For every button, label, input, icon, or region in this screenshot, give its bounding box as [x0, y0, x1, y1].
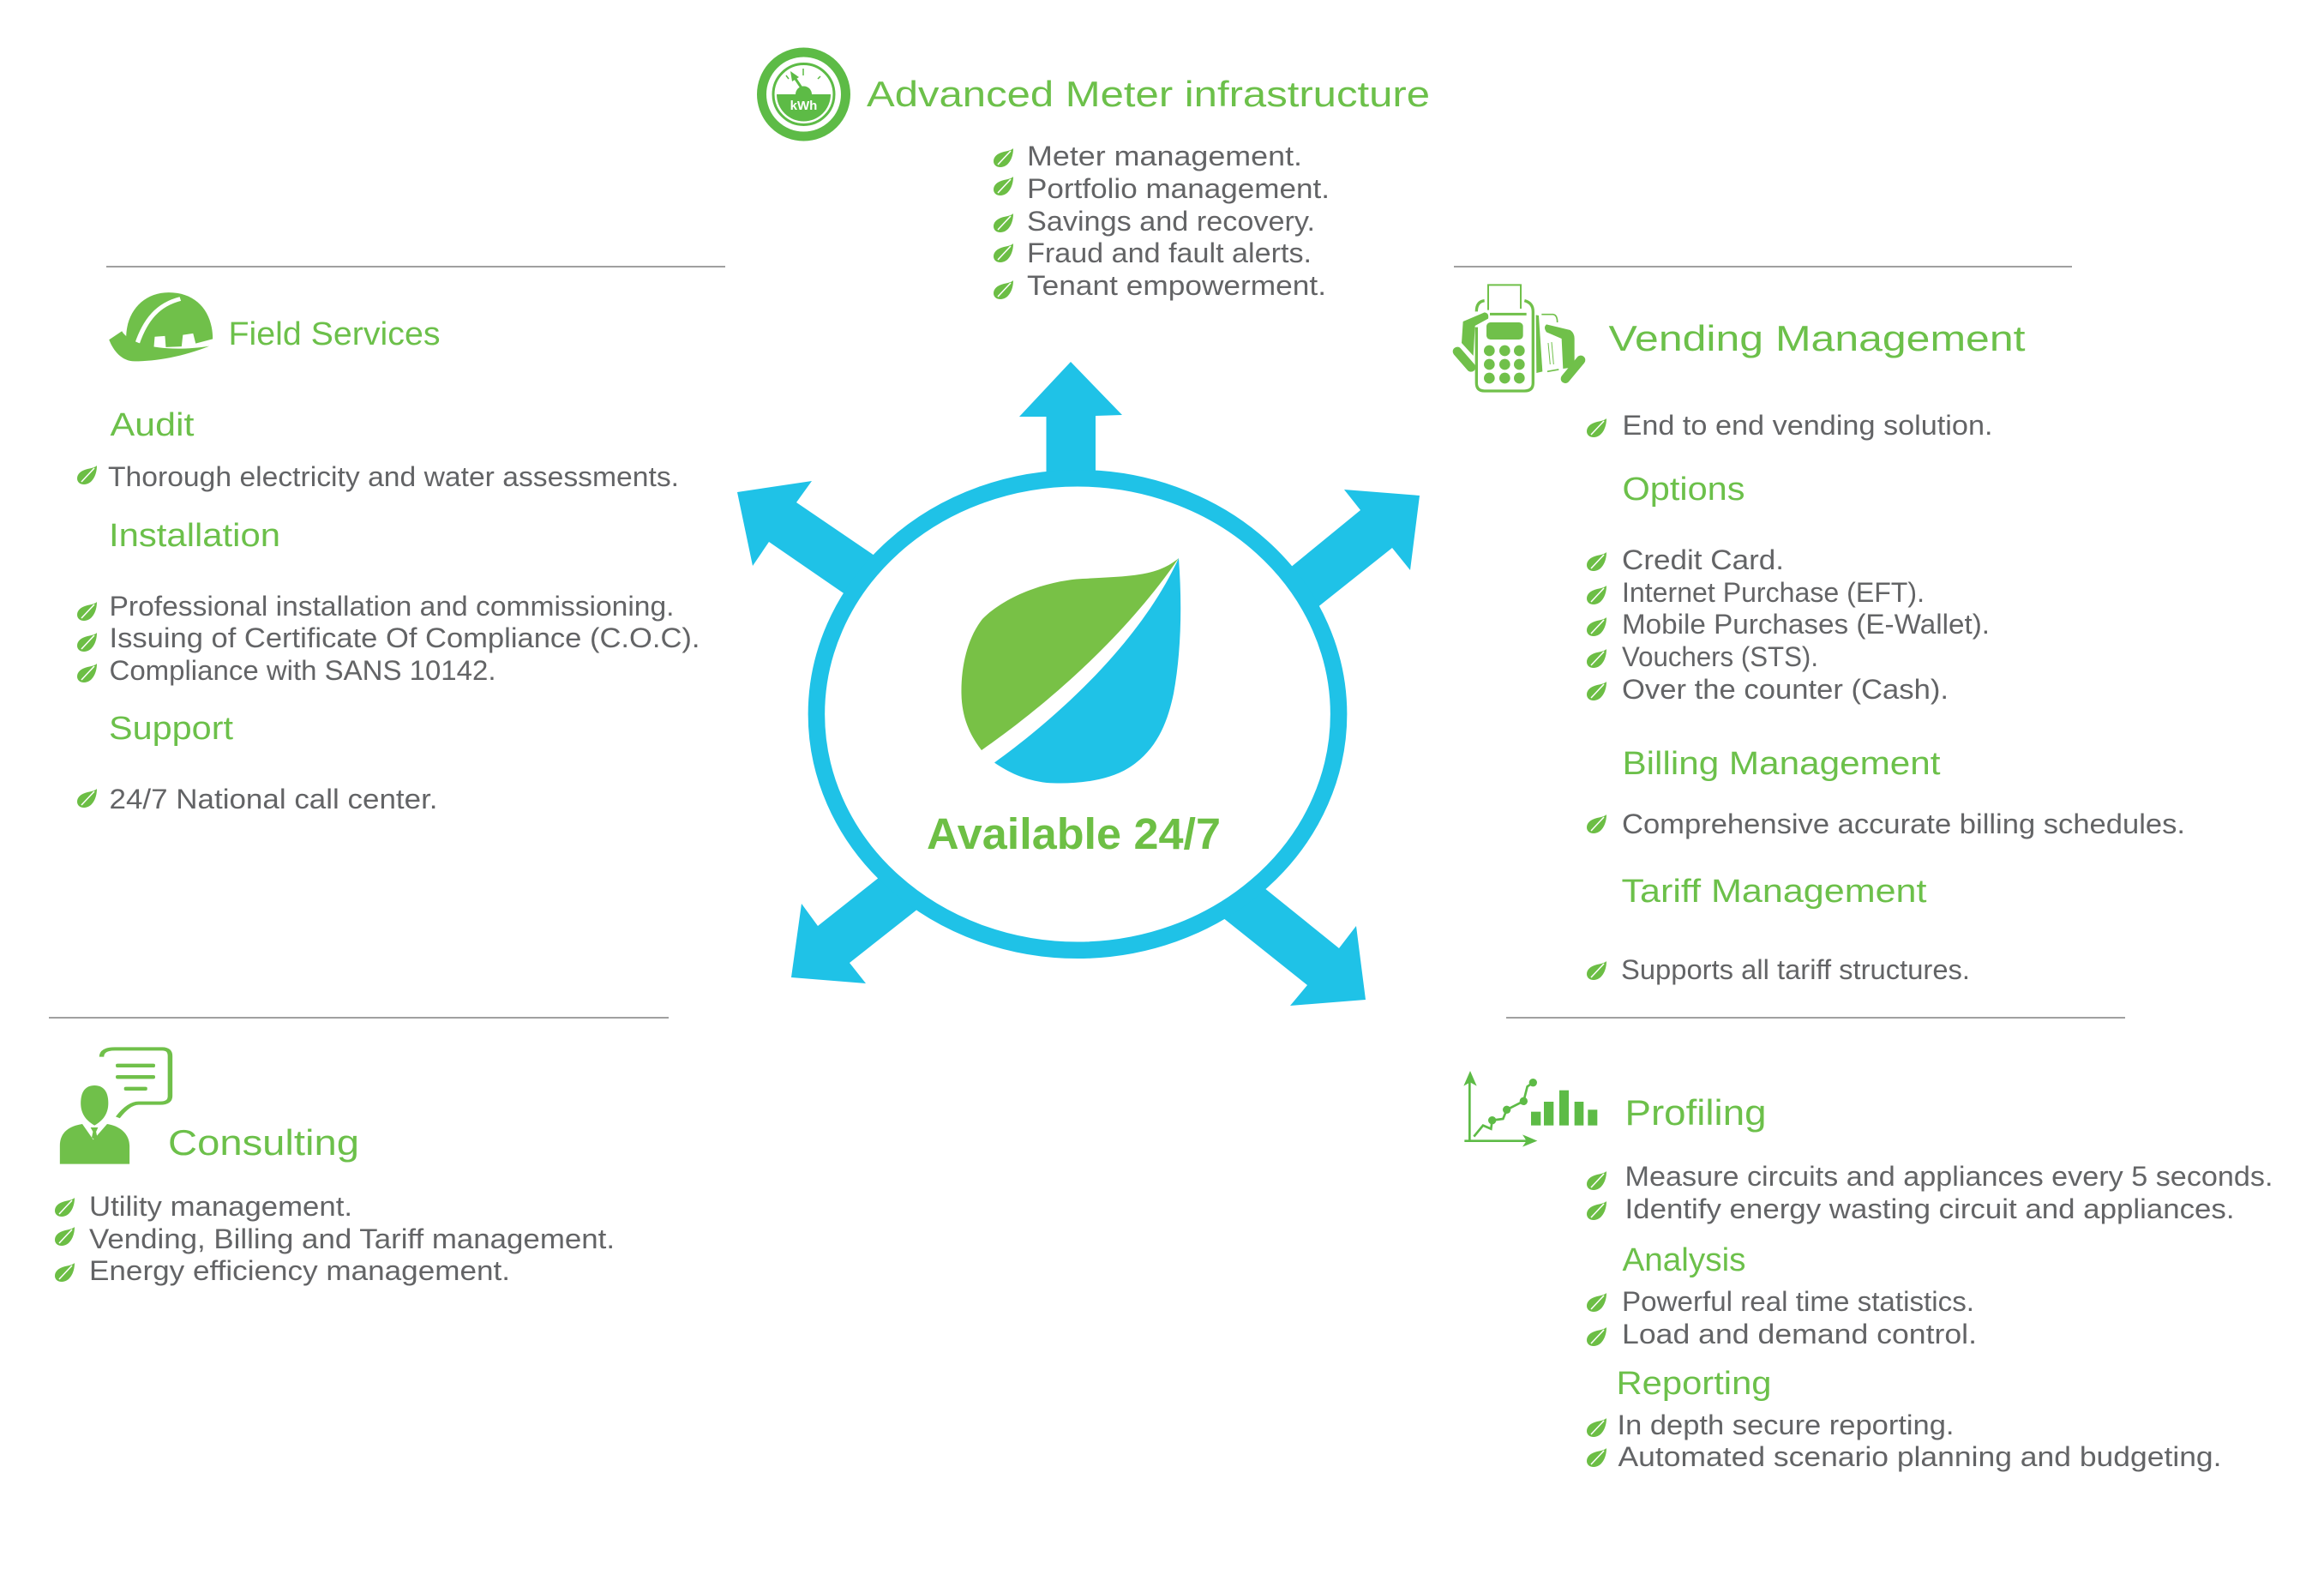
bullets: reporting: Automated scenario planning and budgeting.: [1618, 1441, 2222, 1472]
heading: Vending Management: [1608, 318, 2026, 358]
subheading: Audit: Audit: [110, 407, 195, 443]
bullet: assessments: Thorough electricity and water assessments.: [108, 461, 679, 492]
icon: chart: [1463, 1071, 1597, 1147]
bullets: installation: Compliance with SANS 10142.: [110, 655, 495, 686]
icon: kWh meter: [761, 52, 845, 136]
panel: Consulting: [55, 1049, 615, 1286]
panel: Profiling: [1463, 1071, 2273, 1472]
subheading: Options: Options: [1622, 472, 1745, 508]
bullet list: Portfolio management.: [1027, 173, 1330, 204]
bullet list: [55, 1191, 615, 1286]
bullets: measure: [1587, 1161, 2273, 1224]
arrow: lower right: [1218, 884, 1366, 1006]
arrow: upper right: [1285, 490, 1420, 611]
heading: Advanced Meter infrastructure: [867, 74, 1430, 114]
arrow: lower left: [791, 874, 922, 983]
bullets: options: [1587, 544, 1990, 705]
icon: payment terminal: [1457, 285, 1581, 391]
subheading: Support: Support: [109, 711, 233, 747]
arrow: up: [1019, 362, 1122, 478]
bullets: measure: Identify energy wasting circuit and appliances.: [1625, 1193, 2234, 1224]
icon: hard hat: [109, 292, 213, 361]
bullets: reporting: In depth secure reporting.: [1617, 1410, 1955, 1440]
bullet list: Savings and recovery.: [1027, 206, 1315, 237]
panel: Vending Management: [1457, 285, 2185, 985]
subheading: Billing Management: Billing Management: [1622, 746, 1941, 782]
bullets: installation: Professional installation and commissioning.: [110, 591, 674, 622]
bullet list: Vending, Billing and Tariff management.: [89, 1223, 615, 1254]
bullet list: [994, 141, 1330, 301]
bullet list: Tenant empowerment.: [1027, 270, 1326, 301]
bullets: options: Vouchers (STS).: [1622, 641, 1818, 672]
bullets: options: Credit Card.: [1622, 544, 1784, 575]
bullets: measure: Measure circuits and appliances every 5 seconds.: [1625, 1161, 2273, 1192]
bullets: analysis: Load and demand control.: [1622, 1319, 1977, 1350]
panel: Field Services: [77, 292, 700, 815]
panel: central diagram: [737, 362, 1420, 1006]
heading: Consulting: [168, 1122, 359, 1163]
central leaf: [961, 558, 1180, 784]
icon: consultant with speech bubble: [60, 1049, 170, 1164]
subheading: Reporting: Reporting: [1617, 1366, 1771, 1402]
bullet: end to end: End to end vending solution.: [1622, 410, 1992, 441]
bullet list: Fraud and fault alerts.: [1027, 237, 1312, 268]
ring: [816, 478, 1339, 950]
bullet: call center: 24/7 National call center.: [110, 784, 437, 815]
bullets: reporting: [1587, 1410, 2222, 1472]
label: Available 24/7: Available 24/7: [927, 809, 1221, 858]
bullets: installation: Issuing of Certificate Of Compliance (C.O.C).: [110, 622, 700, 653]
subheading: Analysis: Analysis: [1622, 1242, 1745, 1278]
icon: kWh meter: kWh: [790, 99, 817, 113]
bullets: analysis: Powerful real time statistics.: [1622, 1286, 1974, 1317]
bullet list: Meter management.: [1027, 141, 1302, 171]
subheading: Tariff Management: Tariff Management: [1622, 874, 1927, 910]
bullets: options: Over the counter (Cash).: [1622, 674, 1949, 705]
bullets: analysis: [1587, 1286, 1977, 1350]
subheading: Installation: Installation: [109, 518, 280, 554]
bullet list: Utility management.: [89, 1191, 352, 1222]
bullets: installation: [77, 591, 700, 686]
panel: Advanced Meter infrastructure: [761, 52, 1430, 301]
heading: Profiling: [1625, 1092, 1766, 1133]
heading: Field Services: [228, 316, 441, 352]
bullet list: Energy efficiency management.: [89, 1255, 510, 1286]
bullets: options: Internet Purchase (EFT).: [1622, 577, 1925, 608]
arrow: upper left: [737, 481, 880, 597]
bullet: tariff: Supports all tariff structures.: [1621, 954, 1970, 985]
bullet: billing: Comprehensive accurate billing schedules.: [1622, 809, 2185, 839]
bullets: options: Mobile Purchases (E-Wallet).: [1622, 609, 1990, 640]
